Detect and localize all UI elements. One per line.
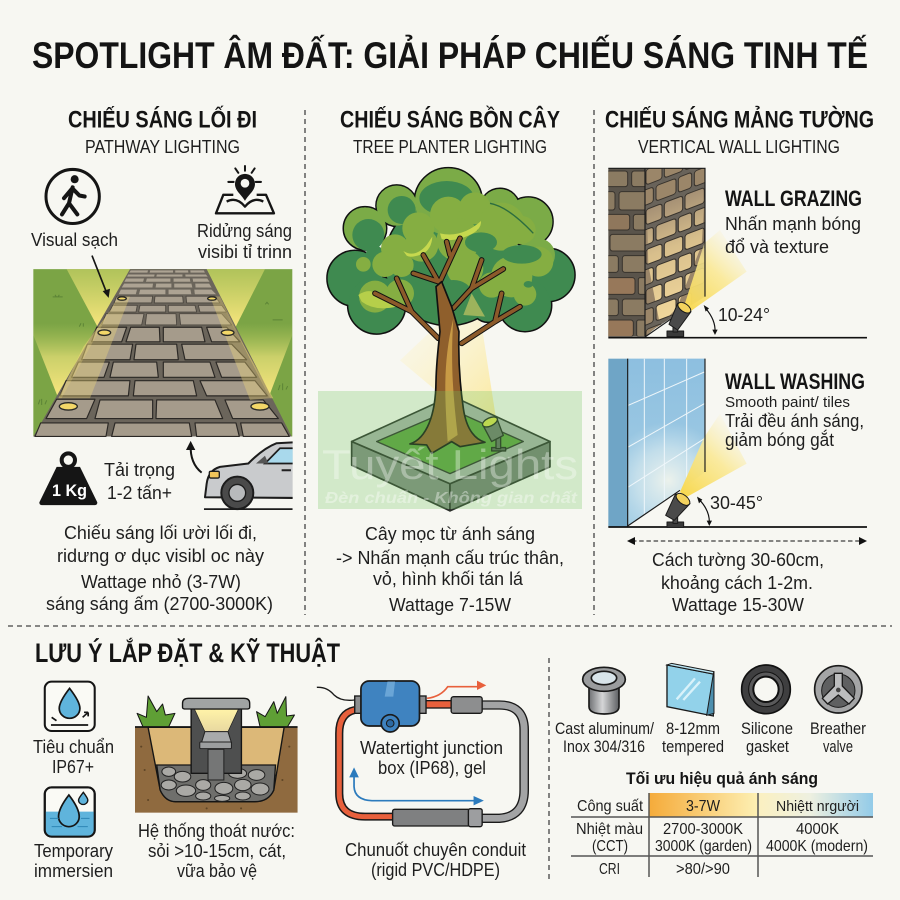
label: map: [197, 221, 292, 262]
heading: tree: [340, 106, 560, 157]
label: conduit: [345, 840, 526, 880]
heading: tree: TREE PLANTER LIGHTING: [353, 136, 547, 157]
labels: material components: gasket: [746, 738, 789, 756]
heading: pathway: CHIẾU SÁNG LỐI ĐI: [68, 106, 257, 134]
label: map: Ridửng sáng: [197, 221, 292, 241]
label: visual: Visual sạch: [31, 230, 118, 250]
label: drainage: sỏi >10-15cm, cát,: [148, 841, 286, 861]
panel: pathway lighting: [31, 106, 297, 614]
icon: weight 1 Kg: 1 Kg: [52, 481, 87, 500]
labels: material components: [555, 720, 866, 756]
label: map: visibi tỉ trinn: [198, 242, 292, 262]
label: wall grazing: Nhấn mạnh bóng: [725, 214, 861, 234]
icon: IP67 water drop: [45, 682, 95, 731]
icon: weight 1 Kg: [39, 453, 97, 505]
icon: temporary immersion: [45, 787, 95, 837]
watermark: [318, 391, 582, 509]
illustration: wall grazing: [608, 168, 867, 338]
labels: material components: 8-12mm: [666, 720, 720, 738]
text: wall description: khoảng cách 1-2m.: [661, 573, 813, 593]
text: tree description: -> Nhấn mạnh cấu trúc thân,: [336, 548, 564, 568]
text: tree description: [336, 524, 564, 615]
text: tree description: Cây mọc từ ánh sáng: [365, 524, 535, 544]
labels: material components: valve: [823, 738, 853, 756]
label: conduit: (rigid PVC/HDPE): [371, 860, 500, 880]
icon: pedestrian: [46, 169, 99, 224]
table: light specs: (CCT): [592, 838, 628, 855]
label: immersion: immersien: [34, 861, 113, 881]
text: pathway description: ridưng ơ dục visibl oc này: [57, 546, 264, 566]
labels: material components: tempered: [662, 738, 724, 756]
label: washing angle: 30-45°: [710, 493, 763, 513]
label: IP67: Tiêu chuẩn: [33, 737, 114, 757]
label: drainage: Hệ thống thoát nước:: [138, 821, 295, 841]
table: light specs: Công suất: [577, 798, 644, 815]
label: wall grazing: WALL GRAZING: [725, 186, 862, 211]
table: light specs: [571, 793, 873, 878]
illustration: tree in planter: [328, 168, 574, 511]
table: light specs: 3000K (garden): [655, 838, 752, 855]
label: wall washing: WALL WASHING: [725, 369, 865, 394]
text: tree description: vỏ, hình khối tán lá: [373, 569, 524, 589]
watermark: Tuyết Lights: [322, 441, 578, 488]
text: wall description: [652, 550, 824, 615]
canopy: [328, 168, 574, 333]
label: junction box: [360, 738, 503, 778]
label: wall washing: giảm bóng gắt: [725, 429, 834, 450]
panel: tree planter lighting: [318, 106, 582, 615]
label: drainage: [138, 821, 295, 881]
label: IP67: [33, 737, 114, 777]
label: junction box: Watertight junction: [360, 738, 503, 758]
table: light specs: 2700-3000K: [663, 821, 743, 838]
icon: car: [186, 441, 297, 509]
light beam on tree: [400, 293, 497, 423]
label: load: Tải trọng: [104, 460, 175, 480]
label: conduit: Chunuốt chuyên conduit: [345, 840, 526, 860]
arrow: to lamp: [92, 256, 110, 298]
watermark: Đèn chuẩn - Không gian chất: [325, 489, 578, 507]
table: light specs: >80/>90: [676, 861, 730, 878]
table: light specs: 4000K: [796, 821, 839, 838]
label: grazing angle: 10-24°: [718, 305, 770, 325]
label: wall grazing: [725, 186, 862, 257]
labels: material components: Inox 304/316: [563, 738, 645, 756]
table: light specs: Nhiệt màu: [576, 821, 643, 838]
illustration: junction box and conduit: [317, 681, 524, 827]
branches and trunk: [375, 238, 520, 453]
label: IP67: IP67+: [52, 757, 94, 777]
uplight fixture: [481, 415, 506, 451]
heading: light optimisation: Tối ưu hiệu quả ánh sáng: [626, 769, 818, 788]
illustration: wall washing: [608, 359, 867, 529]
icon: cast aluminum body: [583, 667, 625, 714]
heading: pathway: PATHWAY LIGHTING: [85, 136, 240, 157]
planter: [352, 396, 550, 511]
table: light specs: Nhiệtt nrgười: [776, 799, 859, 815]
icon: map pin: [216, 166, 274, 213]
label: load: 1-2 tấn+: [107, 483, 172, 503]
label: immersion: [34, 841, 113, 881]
table: light specs: CRI: [599, 861, 620, 878]
text: wall description: Cách tường 30-60cm,: [652, 550, 824, 570]
text: pathway description: Chiếu sáng lối ười lối đi,: [64, 523, 257, 543]
text: tree description: Wattage 7-15W: [389, 595, 511, 615]
text: pathway description: Wattage nhỏ (3-7W): [81, 572, 241, 592]
label: drainage: vữa bảo vệ: [177, 861, 257, 881]
heading: wall: [605, 104, 874, 157]
arrow: wall distance: [627, 537, 867, 545]
labels: material components: Silicone: [741, 720, 793, 738]
text: pathway description: sáng sáng ấm (2700-3000K): [46, 594, 273, 614]
heading: installation: LƯU Ý LẮP ĐẶT & KỸ THUẬT: [35, 637, 340, 668]
illustration: drainage cross-section: [135, 696, 298, 813]
label: wall washing: [725, 369, 865, 450]
label: load: [104, 460, 175, 503]
icon: breather valve: [815, 666, 862, 713]
heading: wall: VERTICAL WALL LIGHTING: [638, 136, 840, 157]
labels: material components: Breather: [810, 720, 866, 738]
heading: pathway: [68, 106, 257, 157]
illustration: pathway with inground lights: [33, 269, 292, 436]
text: pathway description: [46, 523, 273, 614]
icon: tempered glass: [667, 663, 714, 716]
label: wall grazing: đổ và texture: [725, 237, 829, 257]
label: wall washing: Smooth paint/ tiles: [725, 394, 850, 411]
panel: installation and technical notes: [33, 637, 873, 881]
heading: tree: CHIẾU SÁNG BỒN CÂY: [340, 106, 560, 134]
panel: vertical wall lighting: [598, 104, 874, 615]
table: light specs: 4000K (modern): [766, 838, 868, 855]
text: wall description: Wattage 15-30W: [672, 595, 804, 615]
labels: material components: Cast aluminum/: [555, 720, 654, 738]
label: wall washing: Trải đều ánh sáng,: [725, 411, 864, 431]
table: light specs: 3-7W: [686, 798, 721, 815]
label: immersion: Temporary: [34, 841, 113, 861]
label: junction box: box (IP68), gel: [378, 758, 486, 778]
icon: silicone gasket: [742, 665, 790, 714]
